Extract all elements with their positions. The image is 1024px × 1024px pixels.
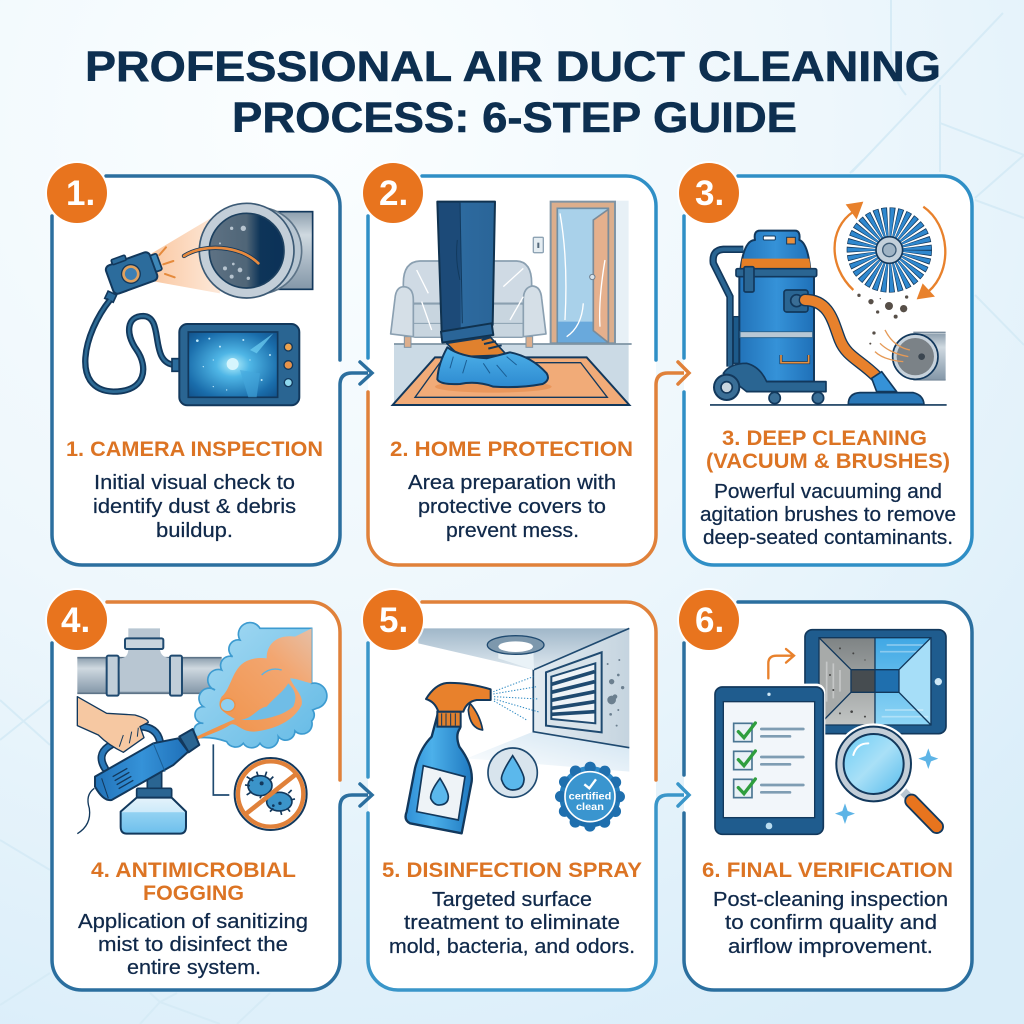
text block: protective covers to [418, 496, 606, 518]
heading [706, 427, 950, 473]
icon: fogger illustration [77, 623, 327, 834]
heading: 4. ANTIMICROBIAL [91, 859, 296, 882]
arrow: step 1 to 2 [360, 362, 372, 384]
icon: spray bottle illustration [406, 628, 629, 833]
text block: mist to disinfect the [98, 934, 288, 956]
text block: prevent mess. [446, 520, 579, 542]
title: PROCESS: 6-STEP GUIDE [232, 94, 797, 142]
panel: step 4 antimicrobial fogging [52, 602, 370, 990]
icon: tablet checklist and magnifier illustration [713, 630, 946, 837]
text block: Powerful vacuuming and [714, 481, 942, 503]
badge 1 [45, 161, 109, 225]
icon: spray bottle illustration: certified [569, 792, 611, 803]
text block: Initial visual check to [94, 472, 295, 494]
badge 3 [677, 161, 741, 225]
icon: spray bottle illustration: clean [576, 802, 604, 813]
text block: buildup. [156, 520, 233, 542]
text block: agitation brushes to remove [700, 504, 956, 526]
badge 1: 1. [66, 174, 95, 213]
badge 3: 3. [695, 174, 724, 213]
text block: airflow improvement. [728, 936, 933, 958]
badge 5 [361, 588, 425, 652]
text block [389, 889, 635, 958]
heading: 3. DEEP CLEANING [722, 427, 927, 450]
badge 2 [361, 161, 425, 225]
text block: Post-cleaning inspection [713, 889, 948, 911]
badge 6 [677, 588, 741, 652]
icon: vacuum and brush illustration [710, 202, 947, 405]
text block [78, 911, 308, 979]
icon: camera and duct illustration [85, 203, 313, 405]
arrow: step 4 to 5 [360, 784, 372, 806]
panel: step 1 camera inspection [52, 176, 370, 565]
panel: step 3 deep cleaning [684, 176, 972, 565]
title [85, 43, 941, 142]
text block: Targeted surface [432, 889, 592, 911]
text block: treatment to eliminate [404, 912, 620, 934]
text block: Area preparation with [408, 472, 616, 494]
text block: mold, bacteria, and odors. [389, 936, 635, 958]
text block: entire system. [127, 957, 261, 979]
heading: 1. CAMERA INSPECTION [66, 438, 323, 461]
text block: to confirm quality and [725, 912, 937, 934]
text block [408, 472, 616, 542]
heading: 5. DISINFECTION SPRAY [382, 859, 642, 882]
badge 6: 6. [695, 601, 724, 640]
heading: FOGGING [143, 882, 244, 905]
text block [713, 889, 948, 958]
text block: deep-seated contaminants. [703, 527, 953, 549]
arrow: step 5 to 6 [678, 784, 689, 806]
panel: step 5 disinfection spray [368, 602, 686, 990]
text block: Application of sanitizing [78, 911, 308, 933]
heading: (VACUUM & BRUSHES) [706, 450, 950, 473]
text block: identify dust & debris [93, 496, 296, 518]
text block [700, 481, 956, 549]
heading [91, 859, 296, 905]
panel: step 2 home protection [368, 176, 686, 565]
badge 4 [45, 588, 109, 652]
badge 5: 5. [379, 601, 408, 640]
arrow: step 2 to 3 [678, 362, 689, 384]
badge 2: 2. [379, 174, 408, 213]
heading: 6. FINAL VERIFICATION [702, 859, 953, 882]
icon: protected room illustration [391, 201, 632, 405]
panel: step 6 final verification [684, 602, 972, 990]
title: PROFESSIONAL AIR DUCT CLEANING [85, 43, 941, 91]
badge 4: 4. [61, 601, 90, 640]
text block [93, 472, 296, 542]
heading: 2. HOME PROTECTION [390, 438, 633, 461]
